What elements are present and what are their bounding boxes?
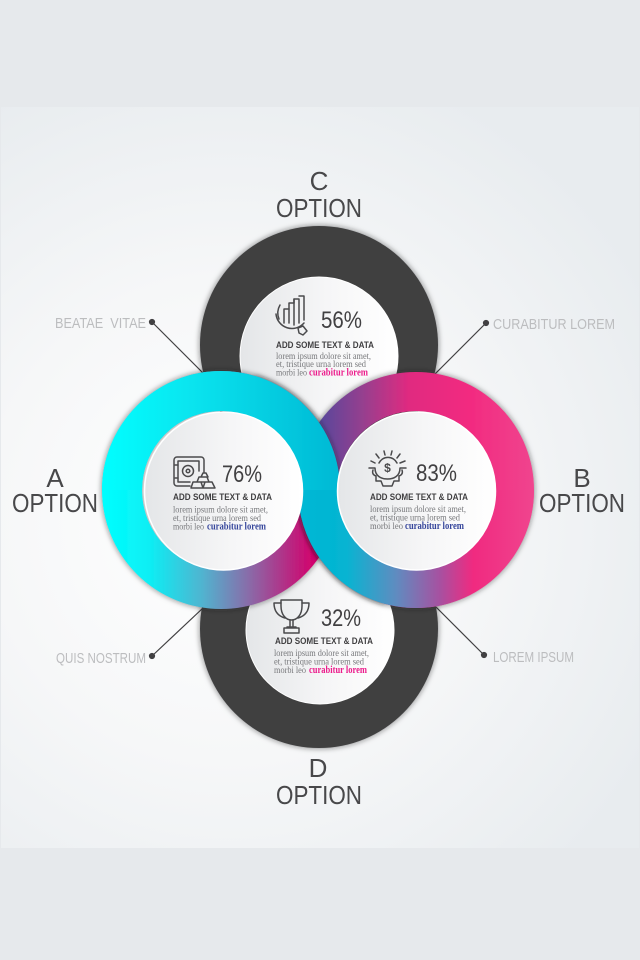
body text: et, tristique urna lorem sed [173, 514, 261, 524]
heading: option C [276, 166, 362, 223]
body text: lorem ipsum dolore sit amet, [276, 352, 371, 362]
heading: option D: OPTION [276, 780, 362, 810]
body text: curabitur lorem [207, 522, 267, 532]
icon: gear with sun and dollar [369, 451, 406, 486]
label: quis nostrum: QUIS NOSTRUM [56, 650, 146, 667]
body text: curabitur lorem [405, 521, 465, 532]
ribbon: upper arc of A [102, 371, 302, 490]
subheading: ADD SOME TEXT & DATA [276, 340, 374, 350]
disc: option A [144, 412, 302, 570]
ring: option C dark [200, 226, 438, 464]
body text: lorem ipsum dolore sit amet, [274, 649, 369, 659]
card content: option C [276, 296, 374, 378]
body text [276, 352, 371, 378]
body text: et, tristique urna lorem sed [370, 514, 460, 524]
heading: option C: C [310, 166, 328, 196]
subheading: ADD SOME TEXT & DATA [370, 492, 468, 502]
label: curabitur lorem: CURABITUR LOREM [493, 316, 615, 333]
heading: option D: D [309, 753, 327, 783]
label: lorem ipsum: LOREM IPSUM [493, 649, 574, 666]
heading: option A [12, 463, 98, 518]
leader line: curabitur lorem [434, 320, 489, 375]
body text [370, 505, 466, 532]
ring: option B base [318, 392, 514, 588]
disc: option D [246, 556, 394, 704]
card content: option B [369, 451, 468, 532]
icon: trophy [274, 600, 309, 633]
leader line: quis nostrum [149, 608, 203, 659]
disc: option C [240, 277, 398, 435]
heading: option B [539, 463, 625, 518]
percentage: 32%: 32% [321, 605, 361, 632]
icon glyph: dollar: $ [384, 461, 391, 475]
leader line: beatae vitae [149, 319, 205, 375]
heading: option A: A [46, 463, 64, 493]
body text [173, 506, 268, 532]
ring: option A base [122, 391, 320, 589]
heading: option A: OPTION [12, 488, 98, 518]
disc: option B [338, 412, 496, 570]
card content: option A [173, 457, 272, 532]
icon: chart under magnifier [276, 296, 307, 335]
body text: et, tristique urna lorem sed [276, 360, 366, 370]
percentage: 76%: 76% [222, 461, 262, 488]
ribbon: lower arc of B [338, 492, 534, 608]
body text: curabitur lorem [309, 368, 369, 378]
label: beatae vitae: BEATAE VITAE [55, 315, 146, 332]
percentage: 83%: 83% [416, 460, 457, 487]
body text: morbi leo [173, 522, 204, 532]
body text: lorem ipsum dolore sit amet, [370, 505, 466, 515]
percentage: 56%: 56% [321, 307, 362, 334]
icon: safe with gold bars [174, 457, 215, 488]
leader line: lorem ipsum [436, 607, 487, 658]
body text: morbi leo [276, 368, 307, 378]
body text: et, tristique urna lorem sed [274, 658, 364, 668]
card content: option D [274, 600, 373, 676]
body text: lorem ipsum dolore sit amet, [173, 506, 268, 516]
ring: option D dark [200, 510, 438, 748]
body text: morbi leo [370, 522, 403, 532]
ribbon: crossing band from A into B [253, 373, 387, 607]
subheading: ADD SOME TEXT & DATA [173, 492, 272, 502]
body text: curabitur lorem [309, 665, 368, 676]
heading: option B: B [573, 463, 591, 493]
body text: morbi leo [274, 666, 306, 676]
heading: option D [276, 753, 362, 810]
subheading: ADD SOME TEXT & DATA [275, 636, 373, 646]
body text [274, 649, 369, 676]
heading: option C: OPTION [276, 193, 362, 223]
heading: option B: OPTION [539, 488, 625, 518]
